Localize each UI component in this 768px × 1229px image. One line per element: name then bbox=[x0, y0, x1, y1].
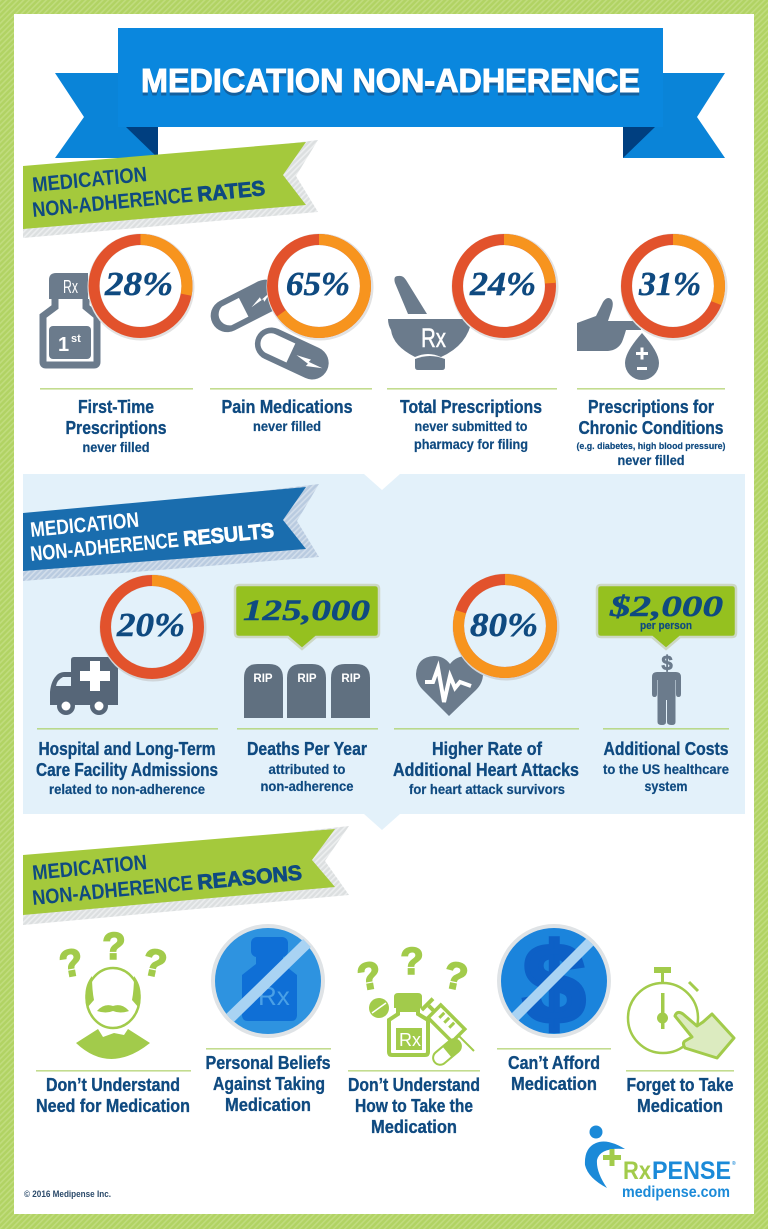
reason: personal beliefs bbox=[206, 924, 331, 1115]
icon: tombstones: RIP bbox=[253, 673, 273, 685]
callout: 125,000: 125,000 bbox=[243, 594, 370, 627]
label: for heart attack survivors bbox=[409, 782, 565, 797]
reason: forget to take bbox=[626, 967, 734, 1116]
label: never filled bbox=[618, 453, 684, 468]
icon: bald man with question marks: ? bbox=[102, 926, 126, 968]
icon: rx bottle bbox=[43, 273, 97, 365]
label: Against Taking bbox=[213, 1074, 325, 1094]
icon: bald man with question marks: ? bbox=[56, 941, 86, 987]
donut: 28% bbox=[88, 234, 194, 340]
panel: results background bbox=[23, 474, 745, 830]
stat: total prescriptions bbox=[387, 234, 558, 452]
label: Chronic Conditions bbox=[578, 418, 724, 438]
label: Higher Rate of bbox=[432, 739, 543, 759]
label: Medication bbox=[371, 1117, 457, 1137]
donut: 80% bbox=[452, 574, 560, 680]
label bbox=[348, 1075, 480, 1137]
label bbox=[247, 739, 367, 794]
label bbox=[66, 397, 166, 455]
divider bbox=[603, 728, 729, 730]
divider bbox=[237, 728, 378, 730]
section ribbon: results: NON-ADHERENCE bbox=[29, 529, 180, 566]
donut: 65% bbox=[266, 234, 374, 340]
divider bbox=[387, 388, 557, 390]
label: First-Time bbox=[78, 397, 154, 417]
stat: deaths per year bbox=[235, 585, 379, 794]
label bbox=[222, 397, 352, 434]
label: Care Facility Admissions bbox=[36, 760, 218, 780]
logo: RxPense: medipense.com bbox=[622, 1184, 730, 1201]
logo: RxPense bbox=[585, 1126, 736, 1201]
label: Medication bbox=[511, 1074, 597, 1094]
donut: 20%: 20% bbox=[116, 607, 185, 644]
stat: heart attacks bbox=[393, 574, 579, 797]
label bbox=[400, 397, 542, 452]
label: attributed to bbox=[268, 762, 346, 777]
donut: 80%: 80% bbox=[470, 607, 538, 644]
divider bbox=[394, 728, 579, 730]
stat: first-time prescriptions bbox=[40, 234, 194, 455]
label: Hospital and Long-Term bbox=[38, 739, 216, 759]
divider bbox=[348, 1070, 480, 1072]
label: Medication bbox=[225, 1095, 311, 1115]
label: never submitted to bbox=[414, 419, 528, 434]
icon: crossed-out bottle: Rx bbox=[258, 981, 290, 1011]
divider bbox=[36, 1070, 191, 1072]
icon: crossed-out dollar: $ bbox=[523, 921, 585, 1046]
label: Don’t Understand bbox=[348, 1075, 480, 1095]
label: Prescriptions for bbox=[588, 397, 714, 417]
label: (e.g. diabetes, high blood pressure) bbox=[576, 441, 726, 452]
icon: crossed-out dollar bbox=[497, 921, 611, 1046]
icon: medicines with question marks: Rx bbox=[399, 1030, 421, 1050]
donut: 28%: 28% bbox=[104, 266, 173, 303]
section ribbon: results bbox=[23, 484, 319, 581]
section ribbon: rates: RATES bbox=[196, 177, 266, 206]
icon: tombstones: RIP bbox=[341, 673, 361, 685]
label bbox=[508, 1053, 600, 1094]
label: Personal Beliefs bbox=[206, 1053, 330, 1073]
reason: can't afford bbox=[497, 921, 611, 1094]
icon: person with dollar head: $ bbox=[661, 653, 673, 675]
divider bbox=[577, 388, 725, 390]
section ribbon: rates bbox=[23, 140, 318, 238]
section ribbon: reasons: MEDICATION bbox=[31, 851, 148, 885]
icon: bald man with question marks bbox=[56, 926, 170, 1059]
reason: don't understand how bbox=[348, 941, 480, 1137]
section ribbon: rates: MEDICATION bbox=[31, 163, 148, 197]
label: to the US healthcare bbox=[603, 762, 729, 777]
label: Additional Heart Attacks bbox=[393, 760, 579, 780]
icon: heart with pulse bbox=[416, 656, 483, 716]
stat: hospital admissions bbox=[36, 574, 218, 797]
label bbox=[206, 1053, 330, 1115]
icon: mortar and pestle: Rx bbox=[421, 323, 446, 353]
title banner bbox=[55, 28, 725, 158]
callout: 125,000 bbox=[235, 585, 379, 649]
donut: 20% bbox=[100, 574, 206, 682]
label: Pain Medications bbox=[222, 397, 352, 417]
divider bbox=[37, 728, 218, 730]
label: related to non-adherence bbox=[49, 782, 205, 797]
label: Forget to Take bbox=[626, 1075, 734, 1095]
section ribbon: reasons bbox=[23, 826, 349, 925]
label bbox=[393, 739, 579, 797]
divider bbox=[626, 1070, 734, 1072]
icon: stopwatch and pointing hand bbox=[628, 967, 734, 1058]
divider bbox=[497, 1048, 611, 1050]
label: Prescriptions bbox=[66, 418, 166, 438]
label: Need for Medication bbox=[36, 1096, 190, 1116]
label bbox=[603, 739, 729, 794]
donut: 24% bbox=[452, 234, 558, 340]
icon: mortar and pestle bbox=[388, 276, 472, 370]
label bbox=[36, 739, 218, 797]
label bbox=[626, 1075, 734, 1116]
icon: crossed-out bottle bbox=[211, 924, 325, 1038]
stat: additional costs bbox=[597, 585, 736, 794]
donut: 65%: 65% bbox=[286, 266, 350, 303]
icon: ambulance bbox=[50, 657, 118, 715]
label: Deaths Per Year bbox=[247, 739, 367, 759]
label: never filled bbox=[82, 440, 150, 455]
section ribbon: results: RESULTS bbox=[182, 519, 275, 551]
icon: rx bottle: 1 bbox=[58, 334, 69, 356]
label: How to Take the bbox=[355, 1096, 473, 1116]
callout: $2,000 per person: $2,000 bbox=[609, 590, 723, 623]
label bbox=[576, 397, 726, 468]
label: non-adherence bbox=[260, 779, 354, 794]
section ribbon: rates: NON-ADHERENCE bbox=[31, 184, 194, 222]
icon: medicines with question marks: ? bbox=[354, 954, 384, 1000]
icon: tombstones bbox=[244, 664, 370, 718]
icon: medicines with question marks: ? bbox=[400, 941, 424, 983]
label: Don’t Understand bbox=[46, 1075, 180, 1095]
label: pharmacy for filing bbox=[414, 437, 528, 452]
section ribbon: results: MEDICATION bbox=[29, 509, 140, 542]
donut: 24%: 24% bbox=[469, 266, 536, 303]
label: Can’t Afford bbox=[508, 1053, 600, 1073]
icon: capsules bbox=[205, 274, 334, 385]
label: never filled bbox=[253, 419, 321, 434]
section ribbon: reasons: NON-ADHERENCE bbox=[31, 872, 194, 910]
reason: don't understand need bbox=[36, 926, 191, 1116]
divider bbox=[206, 1048, 331, 1050]
label bbox=[36, 1075, 190, 1116]
icon: tombstones: RIP bbox=[297, 673, 317, 685]
divider bbox=[210, 388, 372, 390]
icon: finger and blood drop bbox=[577, 298, 659, 380]
logo: RxPense: PENSE bbox=[652, 1157, 731, 1185]
copyright: © 2016 Medipense Inc. bbox=[24, 1189, 111, 1199]
icon: person with dollar head bbox=[652, 653, 681, 725]
section ribbon: reasons: REASONS bbox=[196, 862, 303, 894]
icon: bald man with question marks: ? bbox=[139, 941, 170, 987]
icon: rx bottle: st bbox=[71, 333, 81, 345]
icon: medicines with question marks bbox=[354, 941, 480, 1068]
stat: chronic conditions bbox=[576, 234, 728, 468]
donut: 31% bbox=[620, 234, 728, 340]
callout: $2,000 per person bbox=[597, 585, 736, 649]
logo: RxPense: Rx bbox=[623, 1157, 651, 1185]
callout: $2,000 per person: per person bbox=[640, 620, 692, 632]
title banner: MEDICATION NON-ADHERENCE bbox=[141, 62, 640, 99]
logo: RxPense: ® bbox=[732, 1160, 736, 1167]
icon: rx bottle: Rx bbox=[63, 277, 78, 297]
title banner: MEDICATION NON-ADHERENCE bbox=[141, 65, 640, 102]
divider bbox=[40, 388, 193, 390]
stat: pain medications bbox=[205, 234, 374, 434]
label: Additional Costs bbox=[604, 739, 728, 759]
label: Total Prescriptions bbox=[400, 397, 542, 417]
label: Medication bbox=[637, 1096, 723, 1116]
label: system bbox=[644, 779, 688, 794]
icon: medicines with question marks: ? bbox=[440, 954, 471, 1000]
donut: 31%: 31% bbox=[638, 266, 701, 303]
